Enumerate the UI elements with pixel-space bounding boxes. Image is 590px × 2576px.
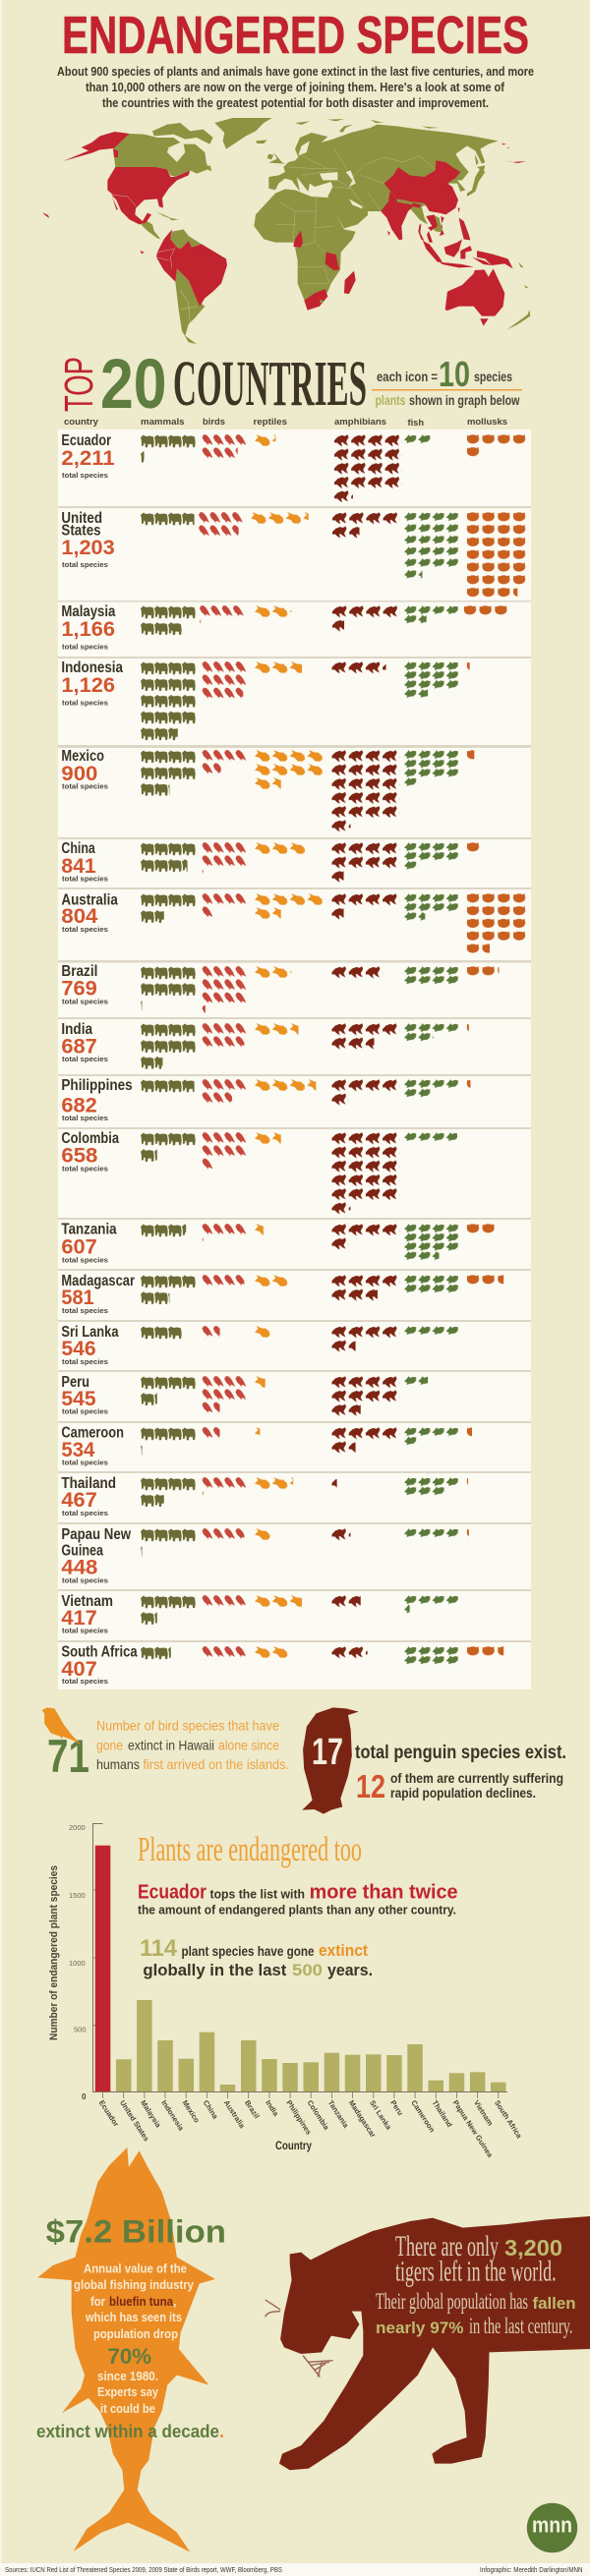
callout: Hawaii birds: 71 bbox=[47, 1730, 89, 1782]
row: Indonesia bbox=[58, 658, 531, 745]
country axis labels: Indonesia bbox=[159, 2098, 186, 2133]
callout: penguins: 12 bbox=[356, 1768, 385, 1804]
row: Philippines: 682 bbox=[61, 1095, 97, 1117]
country axis labels bbox=[97, 2098, 524, 2159]
column headers bbox=[64, 417, 507, 429]
legend: each icon = 10 species bbox=[372, 354, 522, 408]
row: China bbox=[58, 839, 531, 887]
bar chart: endangered plant species: 1500 bbox=[69, 1891, 86, 1900]
row: India: India bbox=[61, 1021, 92, 1038]
row: Colombia: total species bbox=[62, 1164, 108, 1173]
bar chart: endangered plant species bbox=[48, 1823, 524, 2159]
row: United States: 1,203 bbox=[61, 537, 115, 559]
plants text block: extinct bbox=[319, 1941, 368, 1960]
callout: Hawaii birds: first arrived on the islands. bbox=[144, 1756, 289, 1772]
row: Peru bbox=[58, 1372, 531, 1421]
icon: bluefin tuna bbox=[37, 2147, 215, 2552]
legend: each icon = 10 species: plants bbox=[376, 393, 405, 408]
country axis labels: Vietnam bbox=[472, 2098, 495, 2128]
callout: penguins bbox=[302, 1707, 566, 1814]
column headers: reptiles bbox=[254, 417, 287, 428]
column headers: fish bbox=[407, 418, 424, 429]
legend: each icon = 10 species: each icon = bbox=[377, 370, 438, 384]
country axis labels: South Africa bbox=[493, 2098, 524, 2141]
row: Thailand: Thailand bbox=[61, 1475, 116, 1492]
row: Indonesia: Indonesia bbox=[61, 659, 123, 676]
callout: tiger text: nearly 97% bbox=[376, 2318, 464, 2337]
country axis labels: China bbox=[202, 2098, 220, 2121]
row: Papau New Guinea: Papau New bbox=[61, 1526, 131, 1543]
callout: penguins: rapid population declines. bbox=[390, 1785, 536, 1801]
row: Sri Lanka: 546 bbox=[61, 1338, 96, 1360]
bar chart: endangered plant species: 1000 bbox=[69, 1959, 86, 1968]
row: Australia bbox=[58, 889, 531, 960]
row: Malaysia: total species bbox=[62, 643, 108, 652]
row: Philippines: Philippines bbox=[61, 1077, 133, 1094]
country axis labels: Australia bbox=[222, 2098, 247, 2131]
callout: tuna text bbox=[36, 2214, 226, 2441]
country axis labels: Papua New Guinea bbox=[451, 2098, 495, 2159]
country axis labels: Brazil bbox=[243, 2098, 262, 2120]
callout: tuna text: it could be bbox=[100, 2402, 155, 2416]
row: Thailand bbox=[58, 1473, 531, 1522]
row: Brazil: Brazil bbox=[61, 963, 97, 980]
row: Sri Lanka bbox=[58, 1322, 531, 1370]
footer: sources and credit bbox=[0, 2563, 590, 2576]
heading: top 20 countries: COUNTRIES bbox=[173, 348, 367, 420]
callout: tuna text: Experts say bbox=[97, 2385, 158, 2399]
plants text block: more than twice bbox=[310, 1882, 458, 1904]
heading: top 20 countries: TOP bbox=[56, 357, 101, 412]
callout: tuna text: for bbox=[90, 2295, 105, 2309]
row: Malaysia: Malaysia bbox=[61, 603, 115, 620]
row: Indonesia: total species bbox=[62, 699, 108, 708]
logo: mnn bbox=[527, 2503, 577, 2552]
row: Brazil: 769 bbox=[61, 978, 97, 1001]
callout: tiger text: 3,200 bbox=[504, 2235, 562, 2261]
plants text block: plant species have gone bbox=[181, 1943, 315, 1959]
plants text block: 114 bbox=[140, 1935, 178, 1962]
callout: tuna text: since 1980. bbox=[97, 2370, 158, 2383]
callout: tuna text: 70% bbox=[108, 2344, 151, 2369]
row: Colombia: 658 bbox=[61, 1145, 98, 1168]
row: United States bbox=[58, 508, 531, 601]
callout: Hawaii birds: humans bbox=[96, 1756, 140, 1772]
plants text block: tops the list with bbox=[210, 1887, 305, 1902]
plants text block bbox=[138, 1830, 458, 1979]
callout: penguins: of them are currently suffering bbox=[390, 1770, 563, 1786]
bar chart: endangered plant species: 2000 bbox=[69, 1823, 86, 1832]
icon: tiger bbox=[266, 2216, 590, 2470]
row: Ecuador bbox=[58, 429, 531, 506]
callout: tuna text: Annual value of the bbox=[84, 2262, 187, 2276]
plants text block: globally in the last bbox=[143, 1961, 287, 1979]
row: India: total species bbox=[62, 1055, 108, 1063]
row: Sri Lanka: Sri Lanka bbox=[61, 1324, 119, 1341]
column headers: birds bbox=[203, 417, 225, 428]
country axis labels: Sri Lanka bbox=[368, 2098, 393, 2132]
row: Philippines bbox=[58, 1076, 531, 1127]
row: South Africa bbox=[58, 1642, 531, 1689]
row: Vietnam: total species bbox=[62, 1626, 108, 1635]
country axis labels: United States bbox=[118, 2098, 151, 2143]
row: Madagascar: total species bbox=[62, 1306, 108, 1315]
callout: tuna text: bluefin tuna bbox=[109, 2295, 174, 2309]
row: Tanzania: Tanzania bbox=[61, 1222, 117, 1238]
callout: Hawaii birds: extinct in Hawaii bbox=[128, 1738, 214, 1753]
row: China: 841 bbox=[61, 855, 96, 878]
row: Cameroon: 534 bbox=[61, 1439, 95, 1461]
row: South Africa: 407 bbox=[61, 1658, 97, 1681]
country axis labels: Tanzania bbox=[326, 2098, 351, 2130]
column headers: mollusks bbox=[467, 417, 507, 428]
callout: Hawaii birds bbox=[42, 1707, 289, 1782]
legend: each icon = 10 species: shown in graph below bbox=[409, 393, 520, 408]
footer: sources and credit: Sources: IUCN Red List of Threatened Species 2009, 2009 State of Birds report, WWF, Bloomberg, PBS bbox=[5, 2565, 282, 2574]
callout: Hawaii birds: Number of bird species that have bbox=[96, 1718, 279, 1734]
callout: tuna text: global fishing industry bbox=[74, 2278, 194, 2292]
row: South Africa: South Africa bbox=[61, 1644, 138, 1661]
row: Tanzania bbox=[58, 1220, 531, 1269]
row: United States: States bbox=[61, 523, 101, 539]
column headers: amphibians bbox=[334, 417, 386, 428]
country axis labels: Thailand bbox=[431, 2098, 454, 2129]
row: Ecuador: Ecuador bbox=[61, 432, 111, 449]
red bar: Ecuador bbox=[95, 1846, 110, 2091]
callout: tuna text: , bbox=[173, 2295, 176, 2309]
row: Mexico: 900 bbox=[61, 763, 97, 785]
legend: each icon = 10 species: species bbox=[474, 370, 512, 384]
row: India bbox=[58, 1019, 531, 1074]
heading: top 20 countries: 20 bbox=[100, 346, 167, 424]
row: Madagascar bbox=[58, 1271, 531, 1320]
country axis labels: Madagascar bbox=[347, 2098, 378, 2140]
column headers: mammals bbox=[141, 417, 185, 428]
country axis labels: Malaysia bbox=[139, 2098, 163, 2130]
callout: tuna text: . bbox=[219, 2422, 224, 2441]
callout: Hawaii birds: alone since bbox=[218, 1738, 279, 1753]
plants text block: Ecuador bbox=[138, 1882, 206, 1904]
row: Colombia: Colombia bbox=[61, 1130, 119, 1147]
country axis labels: Cameroon bbox=[409, 2098, 437, 2135]
row: Vietnam bbox=[58, 1591, 531, 1640]
row: Vietnam: 417 bbox=[61, 1607, 97, 1630]
row: United States: United bbox=[61, 510, 102, 527]
row: Brazil bbox=[58, 963, 531, 1018]
bar chart: endangered plant species: 0 bbox=[82, 2092, 87, 2101]
row: Vietnam: Vietnam bbox=[61, 1593, 113, 1610]
row: Papau New Guinea: 448 bbox=[61, 1557, 98, 1579]
column headers: country bbox=[64, 417, 99, 428]
y-axis title: Number of endangered plant species bbox=[48, 1865, 60, 2040]
row: Peru: total species bbox=[62, 1407, 108, 1416]
row: Brazil: total species bbox=[62, 997, 108, 1005]
row: Mexico: total species bbox=[62, 782, 108, 791]
row: India: 687 bbox=[61, 1036, 97, 1059]
world map bbox=[42, 118, 530, 344]
row: Indonesia: 1,126 bbox=[61, 674, 115, 697]
row: Philippines: total species bbox=[62, 1114, 108, 1122]
row: Cameroon: total species bbox=[62, 1459, 108, 1467]
row: United States: total species bbox=[62, 560, 108, 569]
row: Madagascar: 581 bbox=[61, 1287, 94, 1309]
callout: tuna text: population drop bbox=[93, 2327, 178, 2341]
callout: tuna text: extinct within a decade bbox=[36, 2422, 219, 2441]
row: Sri Lanka: total species bbox=[62, 1357, 108, 1366]
plants text block: years. bbox=[327, 1961, 373, 1979]
map: americas bbox=[42, 118, 285, 344]
table: top 20 countries bbox=[58, 429, 531, 1689]
intro text: the countries with the greatest potential for both disaster and improvement. bbox=[102, 96, 489, 110]
row: Ecuador: total species bbox=[62, 471, 108, 480]
callout: tiger text: fallen bbox=[533, 2294, 576, 2313]
intro text: than 10,000 others are now on the verge of joining them. Here's a look at some of bbox=[86, 81, 505, 94]
row: Peru: 545 bbox=[61, 1388, 96, 1410]
row: Papau New Guinea: Guinea bbox=[61, 1543, 103, 1560]
row: Thailand: 467 bbox=[61, 1489, 97, 1512]
intro text bbox=[57, 65, 534, 110]
country axis labels: India bbox=[264, 2098, 281, 2118]
row: Malaysia bbox=[58, 601, 531, 657]
legend: each icon = 10 species: 10 bbox=[439, 354, 470, 394]
row: Papau New Guinea bbox=[58, 1524, 531, 1589]
country axis labels: Colombia bbox=[306, 2098, 331, 2132]
logo: mnn: mnn bbox=[532, 2513, 572, 2538]
callout: penguins: 17 bbox=[312, 1732, 343, 1773]
plants text block: 500 bbox=[292, 1961, 323, 1979]
row: Cameroon bbox=[58, 1423, 531, 1471]
callout: tiger text bbox=[376, 2230, 576, 2338]
row: Papau New Guinea: total species bbox=[62, 1575, 108, 1584]
plants text block: the amount of endangered plants than any other country. bbox=[138, 1903, 456, 1918]
row: Tanzania: total species bbox=[62, 1255, 108, 1264]
row: China: total species bbox=[62, 875, 108, 884]
row: South Africa: total species bbox=[62, 1677, 108, 1686]
heading: top 20 countries bbox=[56, 346, 367, 424]
row: Australia: total species bbox=[62, 925, 108, 934]
country axis labels: Ecuador bbox=[97, 2098, 121, 2128]
row: Australia: 804 bbox=[61, 905, 98, 928]
row: Tanzania: 607 bbox=[61, 1236, 97, 1259]
map: europe, africa, asia, oceania bbox=[254, 119, 530, 330]
row: Cameroon: Cameroon bbox=[61, 1425, 124, 1442]
row: Ecuador: 2,211 bbox=[61, 447, 115, 470]
row: Mexico: Mexico bbox=[61, 748, 104, 765]
country axis labels: Peru bbox=[388, 2098, 405, 2117]
heading: plants are endangered too: Plants are endangered too bbox=[138, 1830, 362, 1868]
olive bars: other countries bbox=[116, 2000, 505, 2091]
bar chart: endangered plant species: 500 bbox=[74, 2026, 87, 2034]
x-axis title: Country bbox=[275, 2139, 312, 2152]
row: Malaysia: 1,166 bbox=[61, 618, 115, 641]
row: Australia: Australia bbox=[61, 892, 118, 909]
callout: tuna text: $7.2 Billion bbox=[46, 2214, 226, 2250]
row: Peru: Peru bbox=[61, 1374, 89, 1391]
row: China: China bbox=[61, 840, 95, 857]
country axis labels: Philippines bbox=[284, 2098, 314, 2137]
row: Thailand: total species bbox=[62, 1509, 108, 1517]
row: Colombia bbox=[58, 1129, 531, 1218]
callout: tuna text: which has seen its bbox=[85, 2311, 182, 2324]
country axis labels: Mexico bbox=[181, 2098, 202, 2125]
callout: tiger text: There are only bbox=[395, 2230, 499, 2262]
row: Madagascar: Madagascar bbox=[61, 1273, 135, 1289]
callout: Hawaii birds: gone bbox=[96, 1738, 123, 1753]
row: Mexico bbox=[58, 748, 531, 837]
